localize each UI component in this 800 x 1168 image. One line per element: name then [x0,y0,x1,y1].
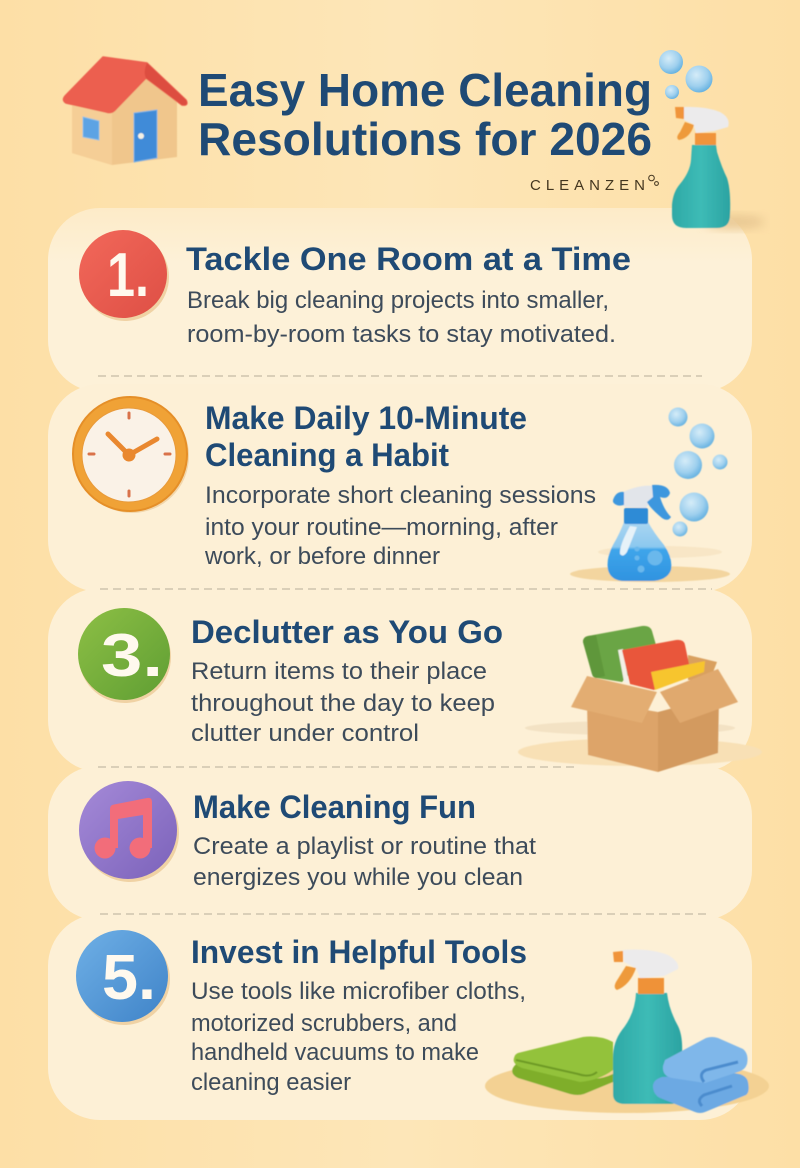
title: Resolutions for 2026 [198,113,652,165]
icon: number 1 badge [79,230,169,321]
icon: number 5 badge: 5. [102,941,156,1013]
description [187,287,616,348]
title [198,64,652,165]
description [193,833,536,891]
step 1 content [79,230,631,348]
description: Return items to their place [191,658,487,685]
icon: music note badge [79,781,179,882]
step 3 content [78,608,762,772]
description: motorized scrubbers, and [191,1010,457,1037]
icon: cardboard box with items [518,626,762,772]
description: Incorporate short cleaning sessions [205,482,596,509]
icon: number 1 badge: 1. [107,241,149,310]
icon: number 3 badge [78,608,171,703]
panel: daily 10-minute habit [48,384,752,592]
description: throughout the day to keep [191,690,495,717]
step 4 content [79,781,536,891]
panel: tackle one room [48,208,752,392]
heading: Declutter as You Go [191,614,503,650]
description: energizes you while you clean [193,864,523,891]
description: work, or before dinner [204,543,440,570]
heading: Tackle One Room at a Time [186,241,631,277]
heading: Make Cleaning Fun [193,789,476,825]
description: handheld vacuums to make [191,1039,479,1066]
icon: number 3 badge: 3. [101,622,163,689]
icon: house [64,57,187,165]
description [191,658,495,747]
panel: make cleaning fun [48,766,752,920]
icon: spray bottle with cloths [485,950,769,1113]
step 5 content [76,930,769,1113]
brand logo: CLEANZEN: CLEANZEN [530,177,645,194]
description: cleaning easier [191,1069,351,1096]
description: Break big cleaning projects into smaller, [187,287,609,314]
icon: header bubbles [659,50,712,99]
description: clutter under control [191,720,419,747]
header [64,50,712,194]
description: Use tools like microfiber cloths, [191,978,526,1005]
description: Create a playlist or routine that [193,833,536,860]
description: into your routine—morning, after [205,514,558,541]
title: Easy Home Cleaning [198,64,652,116]
panel: declutter as you go [48,588,752,772]
description [191,978,526,1096]
description [204,482,596,570]
description: room-by-room tasks to stay motivated. [187,321,616,348]
heading: Invest in Helpful Tools [191,934,527,970]
step 2 content [73,397,730,582]
heading: Make Daily 10-Minute [205,400,527,436]
heading [205,400,527,473]
panel: invest in helpful tools [48,914,752,1120]
heading: Cleaning a Habit [205,437,449,473]
icon: blue spray bottle with bubbles [570,408,730,582]
icon: number 5 badge [76,930,170,1025]
icon: header spray bottle [672,107,765,229]
icon: clock [73,397,189,513]
